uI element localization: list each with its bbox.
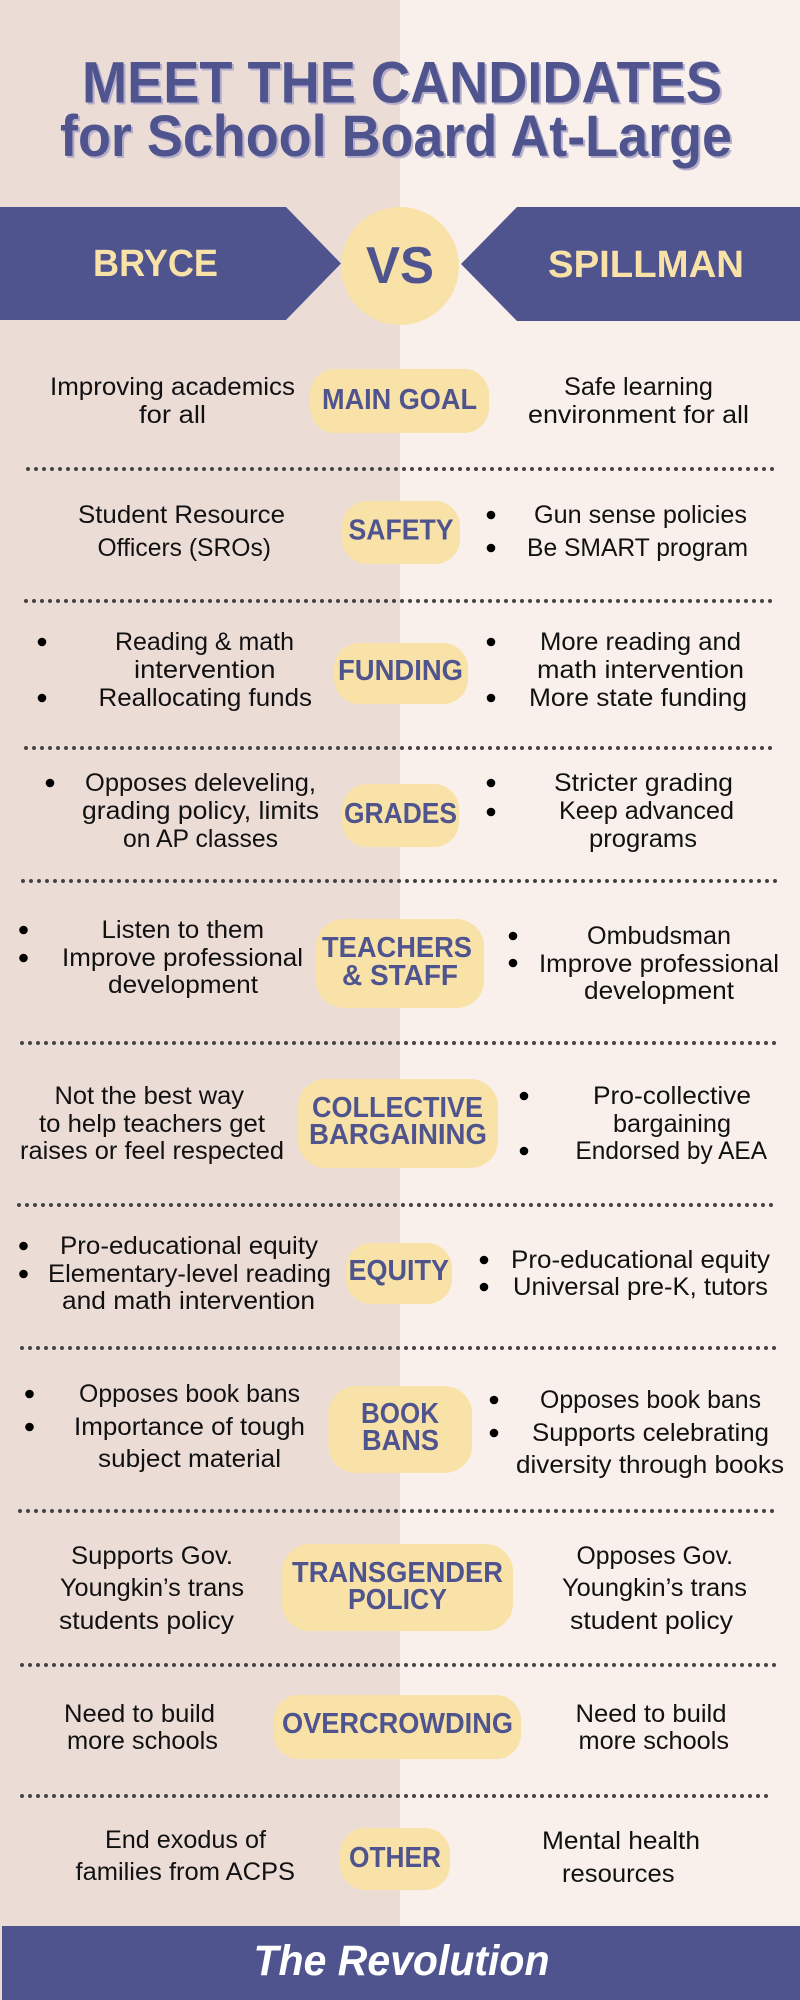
Bryce transgender policy text: Supports Gov. xyxy=(71,1542,233,1570)
safety label xyxy=(342,501,460,564)
overcrowding label xyxy=(274,1695,521,1759)
other label xyxy=(340,1828,450,1890)
VS badge: VS xyxy=(366,237,434,295)
Spillman main goal text: environment for all xyxy=(528,401,749,429)
grades label xyxy=(342,784,459,847)
Spillman collective bargaining list: Pro-collective xyxy=(593,1082,751,1110)
Spillman funding list: More reading and xyxy=(540,628,741,656)
Spillman teachers list: Improve professional xyxy=(539,950,779,978)
Bryce overcrowding text: Need to build xyxy=(64,1700,215,1728)
Spillman safety list xyxy=(487,501,748,562)
Spillman book bans list: diversity through books xyxy=(516,1451,784,1479)
Bryce transgender policy text xyxy=(59,1542,244,1635)
Bryce book bans list: subject material xyxy=(98,1445,281,1473)
Bryce safety text: Officers (SROs) xyxy=(98,534,271,562)
Spillman overcrowding text xyxy=(576,1700,729,1755)
title xyxy=(60,50,732,169)
banner: Spillman xyxy=(461,207,800,321)
banner: Bryce xyxy=(0,207,341,320)
Spillman transgender policy text: Opposes Gov. xyxy=(576,1542,733,1570)
Bryce book bans list xyxy=(25,1380,305,1473)
footer: The Revolution: The Revolution xyxy=(254,1937,550,1985)
Bryce collective bargaining text: Not the best way xyxy=(54,1082,244,1110)
main goal label: MAIN GOAL xyxy=(322,384,477,416)
Spillman equity list xyxy=(480,1246,771,1301)
Bryce grades list: on AP classes xyxy=(123,825,278,853)
row: transgender policy xyxy=(59,1542,747,1635)
grades label: GRADES xyxy=(344,798,457,830)
Bryce collective bargaining text xyxy=(20,1082,284,1165)
title: for School Board At-Large xyxy=(60,104,732,169)
Spillman collective bargaining list: bargaining xyxy=(613,1110,731,1138)
book bans label: BOOK xyxy=(361,1398,439,1430)
row: collective bargaining xyxy=(20,1079,767,1168)
banner: Spillman: SPILLMAN xyxy=(548,244,744,286)
row: safety xyxy=(78,501,748,564)
teachers and staff label: TEACHERS xyxy=(322,932,472,964)
Spillman grades list: Stricter grading xyxy=(554,769,733,797)
Spillman book bans list: Opposes book bans xyxy=(540,1386,761,1414)
row: funding xyxy=(38,628,747,712)
Bryce funding list: Reallocating funds xyxy=(98,684,312,712)
Spillman overcrowding text: more schools xyxy=(578,1727,729,1755)
Spillman equity list: Pro-educational equity xyxy=(511,1246,771,1274)
Bryce main goal text: Improving academics xyxy=(50,373,295,401)
equity label: EQUITY xyxy=(348,1255,449,1287)
Spillman transgender policy text: Youngkin’s trans xyxy=(562,1574,747,1602)
Spillman main goal text: Safe learning xyxy=(564,373,713,401)
funding label: FUNDING xyxy=(338,655,463,687)
Spillman funding list xyxy=(487,628,747,712)
Bryce teachers list: Improve professional xyxy=(62,944,303,972)
Spillman teachers list: development xyxy=(584,977,734,1005)
Bryce grades list: grading policy, limits xyxy=(82,797,319,825)
Spillman transgender policy text: student policy xyxy=(570,1607,734,1635)
Spillman main goal text xyxy=(528,373,749,429)
safety label: SAFETY xyxy=(348,514,454,546)
Spillman grades list xyxy=(487,769,734,853)
book bans label: BANS xyxy=(362,1425,439,1457)
Bryce equity list: Elementary-level reading xyxy=(48,1260,331,1288)
Bryce book bans list: Opposes book bans xyxy=(79,1380,300,1408)
Bryce other text: families from ACPS xyxy=(76,1858,295,1886)
Bryce funding list: intervention xyxy=(134,656,276,684)
Spillman teachers list xyxy=(509,922,779,1005)
row: teachers and staff xyxy=(19,916,779,1008)
row: main goal xyxy=(50,369,749,433)
collective bargaining label xyxy=(298,1079,498,1168)
Bryce funding list xyxy=(38,628,312,712)
teachers and staff label xyxy=(316,919,484,1008)
Spillman book bans list: Supports celebrating xyxy=(532,1419,769,1447)
Bryce book bans list: Importance of tough xyxy=(74,1413,305,1441)
Spillman funding list: math intervention xyxy=(537,656,744,684)
VS badge xyxy=(341,207,459,325)
Spillman other text xyxy=(542,1827,700,1888)
transgender policy label: POLICY xyxy=(348,1584,447,1616)
Spillman grades list: Keep advanced xyxy=(559,797,734,825)
Spillman grades list: programs xyxy=(589,825,697,853)
Bryce collective bargaining text: raises or feel respected xyxy=(20,1137,284,1165)
Spillman transgender policy text xyxy=(562,1542,747,1635)
Bryce overcrowding text: more schools xyxy=(67,1727,218,1755)
Spillman other text: resources xyxy=(562,1860,674,1888)
main goal label xyxy=(310,369,489,433)
Bryce grades list: Opposes deleveling, xyxy=(85,769,316,797)
title: MEET THE CANDIDATES xyxy=(82,50,722,116)
Bryce collective bargaining text: to help teachers get xyxy=(39,1110,265,1138)
Bryce teachers list: Listen to them xyxy=(102,916,264,944)
book bans label xyxy=(328,1386,472,1473)
Bryce equity list: Pro-educational equity xyxy=(60,1232,319,1260)
row: grades xyxy=(46,769,734,853)
Bryce main goal text xyxy=(50,373,295,429)
Bryce teachers list xyxy=(19,916,303,999)
collective bargaining label: BARGAINING xyxy=(309,1119,487,1151)
Bryce transgender policy text: Youngkin’s trans xyxy=(60,1574,244,1602)
Spillman collective bargaining list xyxy=(520,1082,767,1165)
Bryce teachers list: development xyxy=(108,971,258,999)
other label: OTHER xyxy=(349,1842,441,1874)
row: equity xyxy=(19,1232,771,1315)
footer: The Revolution xyxy=(2,1926,800,2000)
funding label xyxy=(334,643,468,704)
Spillman teachers list: Ombudsman xyxy=(587,922,731,950)
Spillman book bans list xyxy=(490,1386,784,1479)
Bryce safety text: Student Resource xyxy=(78,501,285,529)
overcrowding label: OVERCROWDING xyxy=(282,1708,513,1740)
Spillman funding list: More state funding xyxy=(529,684,747,712)
Bryce other text xyxy=(76,1826,295,1886)
Spillman other text: Mental health xyxy=(542,1827,700,1855)
banner: Bryce: BRYCE xyxy=(93,243,218,285)
Spillman collective bargaining list: Endorsed by AEA xyxy=(576,1137,767,1165)
Spillman equity list: Universal pre-K, tutors xyxy=(513,1273,768,1301)
teachers and staff label: & STAFF xyxy=(342,960,458,992)
Spillman overcrowding text: Need to build xyxy=(576,1700,726,1728)
Bryce main goal text: for all xyxy=(139,401,206,429)
row: other xyxy=(76,1826,700,1890)
Bryce grades list xyxy=(46,769,319,853)
row: book bans xyxy=(25,1380,784,1479)
Bryce transgender policy text: students policy xyxy=(59,1607,235,1635)
Bryce safety text xyxy=(78,501,285,562)
Bryce funding list: Reading & math xyxy=(115,628,294,656)
Bryce equity list: and math intervention xyxy=(62,1287,315,1315)
collective bargaining label: COLLECTIVE xyxy=(312,1092,483,1124)
transgender policy label xyxy=(282,1544,513,1631)
Spillman safety list: Be SMART program xyxy=(527,534,748,562)
Bryce overcrowding text xyxy=(64,1700,218,1755)
equity label xyxy=(346,1243,452,1304)
Bryce other text: End exodus of xyxy=(105,1826,266,1854)
transgender policy label: TRANSGENDER xyxy=(292,1557,503,1589)
Bryce equity list xyxy=(19,1232,331,1315)
row: overcrowding xyxy=(64,1695,729,1759)
Spillman safety list: Gun sense policies xyxy=(534,501,747,529)
